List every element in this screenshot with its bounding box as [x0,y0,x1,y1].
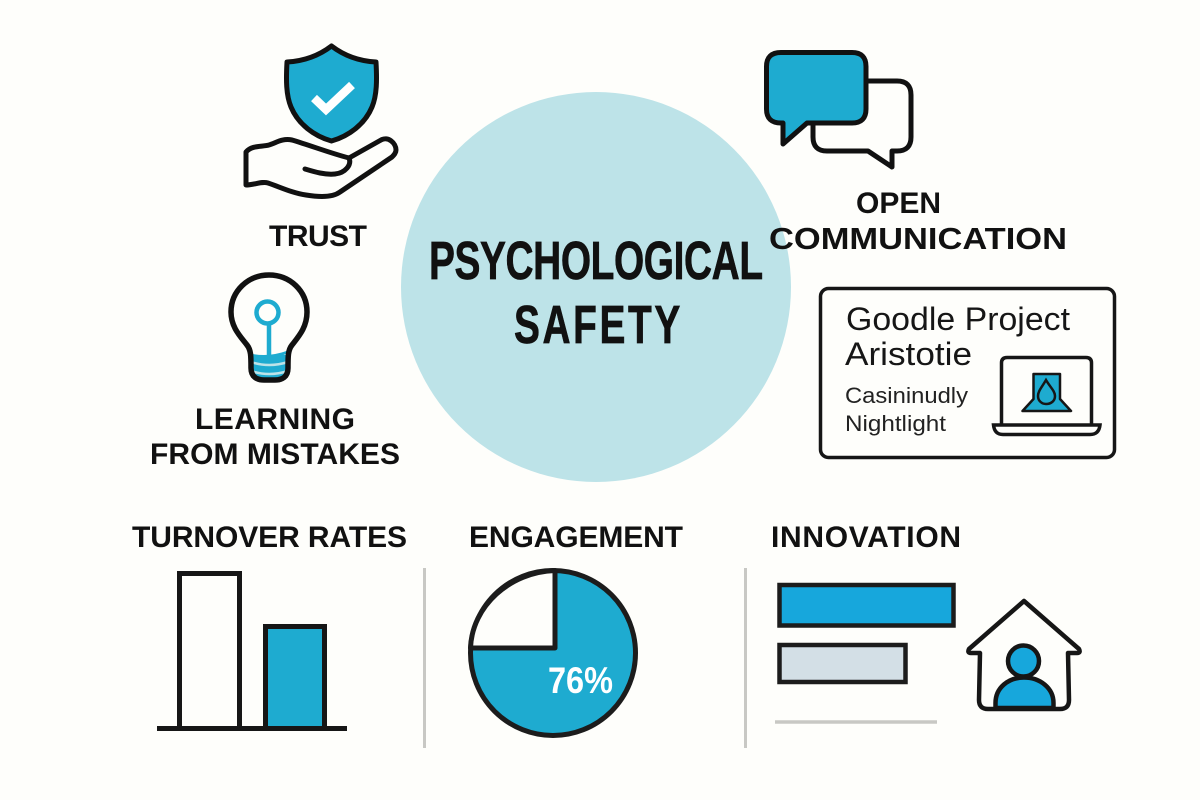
card subtext: Nightlight [845,411,946,436]
bar chart [157,574,347,728]
icon: speech bubbles [766,52,911,167]
trust block [246,46,396,253]
icon: house with person [968,601,1080,709]
label: open communication: OPEN [856,187,941,220]
card subtext: Casininudly [845,383,968,408]
panel: turnover rates [132,521,407,728]
label: learning from mistakes [150,403,400,471]
learning from mistakes block [150,275,400,471]
label: learning from mistakes: LEARNING [195,403,355,436]
pie chart: 76% [548,660,613,701]
title: SAFETY [514,294,680,354]
pie chart [470,570,636,736]
card heading: Goodle Project [846,301,1070,337]
card subtext [845,383,968,436]
icon: open hand [246,139,396,197]
heading: innovation: INNOVATION [771,521,961,554]
card heading [845,301,1070,372]
panel: engagement [469,521,683,736]
icon: laptop [994,358,1100,434]
horizontal bars [775,585,954,722]
icon: shield with check [286,46,377,141]
card heading: Aristotie [845,336,972,372]
label: learning from mistakes: FROM MISTAKES [150,438,400,471]
central circle with title [401,92,791,482]
heading: turnover rates: TURNOVER RATES [132,521,407,554]
title [429,230,763,354]
title: PSYCHOLOGICAL [429,230,763,290]
label: open communication: COMMUNICATION [769,221,1067,256]
panel: Google Project Aristotle card [820,288,1114,458]
icon: light bulb [231,275,307,380]
open communication block [766,52,1067,256]
panel: innovation [771,521,1080,722]
heading: engagement: ENGAGEMENT [469,521,683,554]
label: open communication [769,187,1067,256]
label: trust: TRUST [269,220,367,253]
